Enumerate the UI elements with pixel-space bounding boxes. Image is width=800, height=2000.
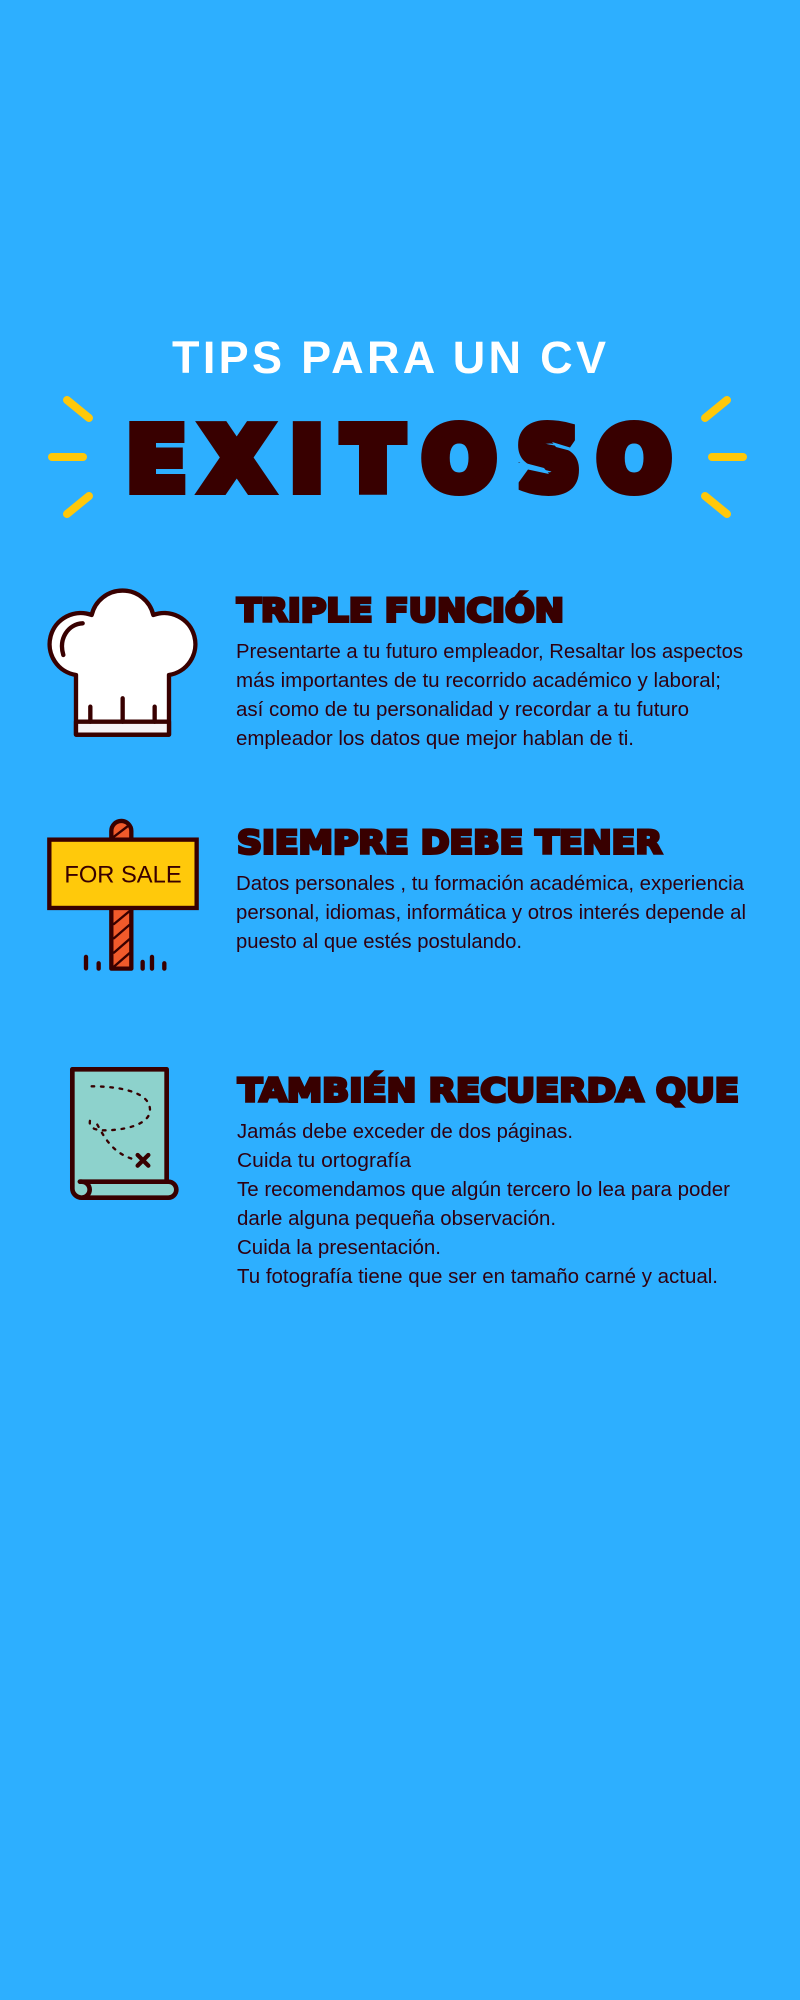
text block: más importantes de tu recorrido académico y laboral; — [236, 670, 721, 692]
heading: TAMBIÉN RECUERDA QUE — [238, 1072, 739, 1110]
icon: treasure map — [72, 1069, 176, 1198]
heading: SIEMPRE DEBE TENER — [237, 824, 662, 862]
title: tips para un cv: TIPS PARA UN CV — [172, 332, 606, 383]
panel: triple funcion — [236, 590, 743, 750]
text block: Cuida tu ortografía — [237, 1150, 412, 1172]
text block: empleador los datos que mejor hablan de ti. — [236, 728, 634, 750]
text block — [236, 873, 746, 953]
icon: yellow rays right — [705, 400, 743, 514]
text block: Tu fotografía tiene que ser en tamaño carné y actual. — [237, 1266, 718, 1288]
icon: for sale sign — [49, 821, 197, 969]
text block — [237, 1121, 730, 1288]
text block: Cuida la presentación. — [237, 1237, 441, 1259]
text block: darle alguna pequeña observación. — [237, 1208, 556, 1230]
text block: personal, idiomas, informática y otros interés depende al — [236, 902, 746, 924]
text block: Te recomendamos que algún tercero lo lea para poder — [237, 1179, 730, 1201]
title: exitoso: EXITOSO — [128, 411, 670, 510]
text block — [236, 641, 743, 750]
sign text: FOR SALE — [64, 862, 182, 888]
text block: puesto al que estés postulando. — [236, 931, 522, 953]
panel: siempre debe tener — [236, 824, 746, 953]
text block: Jamás debe exceder de dos páginas. — [237, 1121, 573, 1143]
icon: chef hat — [50, 591, 195, 735]
text block: así como de tu personalidad y recordar a tu futuro — [236, 699, 689, 721]
panel: tambien recuerda que — [237, 1072, 739, 1288]
text block: Presentarte a tu futuro empleador, Resaltar los aspectos — [236, 641, 743, 663]
icon: yellow rays left — [52, 400, 89, 514]
text block: Datos personales , tu formación académica, experiencia — [236, 873, 745, 895]
heading: TRIPLE FUNCIÓN — [237, 590, 564, 630]
